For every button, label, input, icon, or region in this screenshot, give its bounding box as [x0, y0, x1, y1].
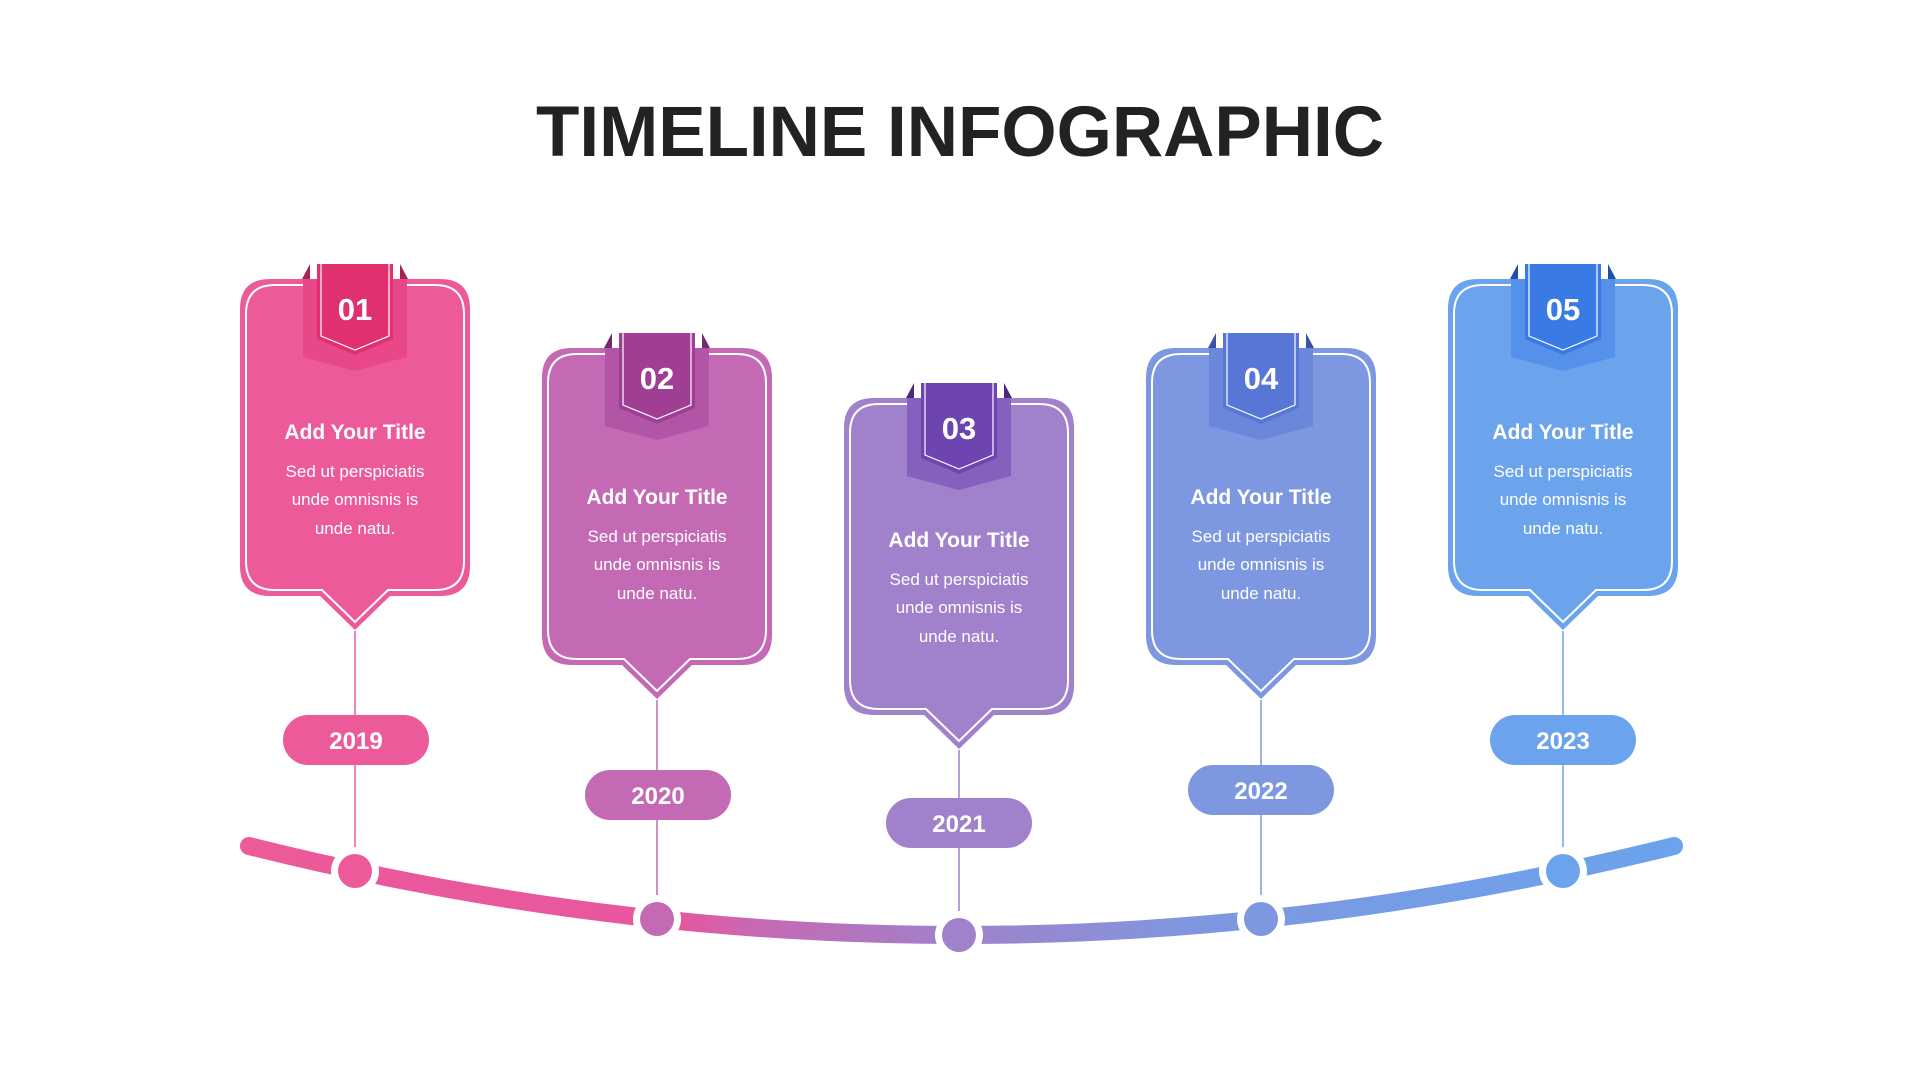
card 02 — [542, 333, 772, 699]
connector lines — [355, 631, 1563, 935]
text 05: unde natu. — [1523, 519, 1603, 538]
text 02: unde natu. — [617, 584, 697, 603]
ribbon 02: 02 — [640, 361, 674, 396]
text 02 — [586, 486, 728, 603]
ribbon 03: 03 — [942, 411, 976, 446]
ribbon 01 — [302, 264, 408, 371]
text 02: Add Your Title — [586, 486, 728, 509]
ribbon 05: 05 — [1546, 292, 1580, 327]
year pill: 2023: 2023 — [1536, 728, 1590, 755]
year pill: 2022: 2022 — [1234, 778, 1288, 805]
text 01: unde omnisnis is — [292, 490, 418, 509]
ribbon 04 — [1208, 333, 1314, 440]
year pill: 2020 — [585, 770, 731, 820]
text 04: Sed ut perspiciatis — [1192, 527, 1330, 546]
card 03 — [844, 383, 1074, 749]
text 01: Sed ut perspiciatis — [286, 462, 424, 481]
text 04: Add Your Title — [1190, 486, 1332, 509]
timeline curve — [249, 846, 1674, 935]
timeline dots — [331, 847, 1587, 959]
year pill: 2019 — [283, 715, 429, 765]
text 01 — [284, 421, 426, 538]
text 03: unde natu. — [919, 627, 999, 646]
year pill: 2021: 2021 — [932, 811, 986, 838]
text 02: unde omnisnis is — [594, 555, 720, 574]
title: TIMELINE INFOGRAPHIC — [536, 93, 1384, 172]
year pill: 2021 — [886, 798, 1032, 848]
year pill: 2023 — [1490, 715, 1636, 765]
text 02: Sed ut perspiciatis — [588, 527, 726, 546]
text 05: Sed ut perspiciatis — [1494, 462, 1632, 481]
ribbon 03 — [906, 383, 1012, 490]
text 01: unde natu. — [315, 519, 395, 538]
ribbon 04: 04 — [1244, 361, 1279, 396]
text 03: unde omnisnis is — [896, 598, 1022, 617]
text 04: unde natu. — [1221, 584, 1301, 603]
year pill: 2022 — [1188, 765, 1334, 815]
text 05: Add Your Title — [1492, 421, 1634, 444]
text 03: Sed ut perspiciatis — [890, 570, 1028, 589]
card 05 — [1448, 264, 1678, 630]
ribbon 02 — [604, 333, 710, 440]
text 01: Add Your Title — [284, 421, 426, 444]
card 04 — [1146, 333, 1376, 699]
text 03: Add Your Title — [888, 529, 1030, 552]
ribbon 05 — [1510, 264, 1616, 371]
year pill: 2020: 2020 — [631, 783, 685, 810]
text 05: unde omnisnis is — [1500, 490, 1626, 509]
card 01 — [240, 264, 470, 630]
text 04 — [1190, 486, 1332, 603]
text 03 — [888, 529, 1030, 646]
year pill: 2019: 2019 — [329, 728, 383, 755]
text 05 — [1492, 421, 1634, 538]
ribbon 01: 01 — [338, 292, 372, 327]
text 04: unde omnisnis is — [1198, 555, 1324, 574]
